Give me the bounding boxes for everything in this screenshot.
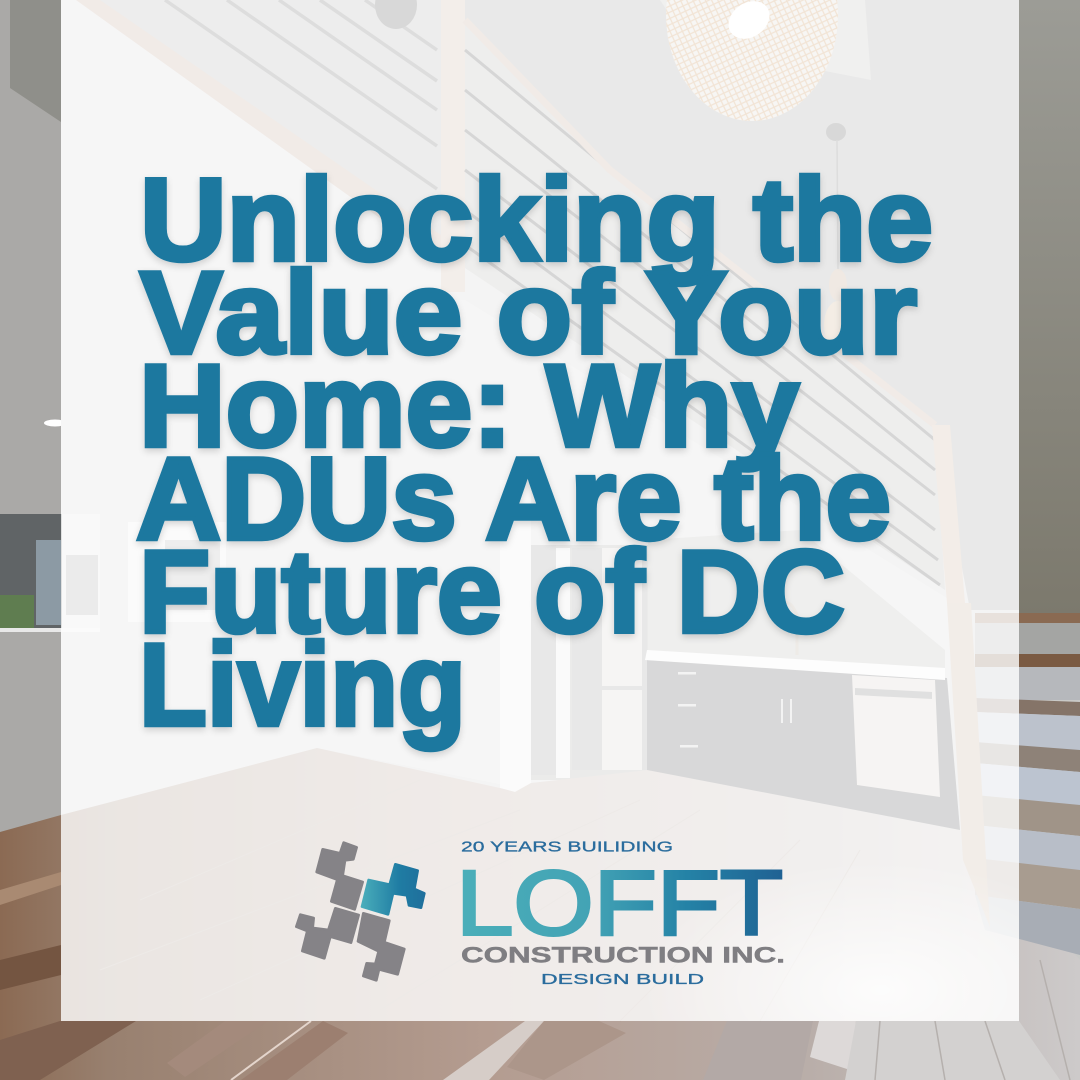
title: Home: Why [139, 340, 799, 471]
left wall strip [0, 0, 61, 1021]
pendant lamp [660, 0, 871, 121]
logo design build: DESIGN BUILD [541, 971, 704, 988]
title: Future of DC [139, 526, 845, 657]
cabinet handles [678, 672, 792, 748]
floor [0, 748, 1080, 1080]
ceiling light left [44, 420, 66, 426]
windows [0, 514, 100, 629]
handrail [465, 20, 935, 425]
logo subtitle: CONSTRUCTION INC. [461, 942, 785, 968]
faucet [782, 602, 797, 655]
floor planks [0, 780, 1070, 1080]
cable rails left [165, 0, 437, 189]
fridge [572, 548, 647, 770]
logo icon [296, 843, 424, 980]
ceiling [465, 0, 1080, 610]
cabinets [647, 660, 960, 830]
title: Value of Your [140, 247, 917, 378]
title: ADUs Are the [136, 433, 891, 564]
title [136, 154, 933, 750]
logo: Lofft Construction [296, 838, 785, 988]
title: Unlocking the [140, 154, 933, 285]
recess behind kitchen [530, 545, 648, 780]
right wall strip [1019, 0, 1080, 614]
post [441, 0, 465, 292]
logo wordmark: LOFFT [456, 852, 783, 954]
pillar [500, 480, 531, 792]
logo tagline: 20 YEARS BUILIDING [461, 838, 673, 856]
dishwasher [852, 675, 940, 797]
backsplash under stairs [648, 530, 945, 680]
cable rails right [465, 50, 940, 585]
stair stringer band [76, 0, 441, 262]
stair treads and risers [975, 613, 1080, 955]
ceiling fixture [375, 0, 417, 29]
railing region right of post [465, 20, 945, 590]
small pendant [824, 123, 852, 349]
newel and handrail [932, 425, 965, 603]
title: Living [139, 619, 466, 750]
counter [645, 650, 945, 680]
bright light wash on floor [760, 926, 938, 1021]
lower bright wall [61, 0, 950, 815]
stair wall above band [80, 0, 441, 252]
